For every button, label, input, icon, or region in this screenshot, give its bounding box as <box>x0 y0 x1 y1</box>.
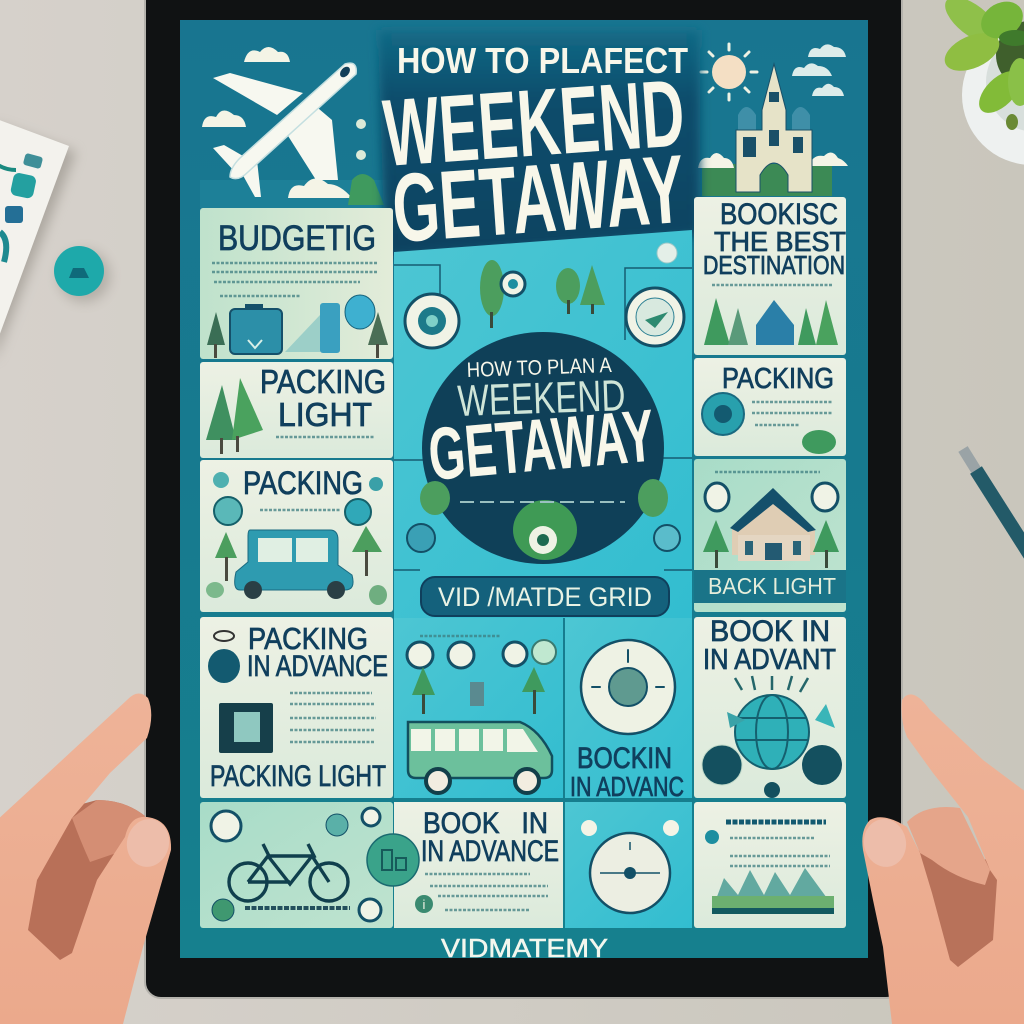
panel: packing in advance <box>200 617 393 798</box>
icon: house <box>730 488 816 561</box>
panel: budgeting: BUDGETIG <box>218 219 376 258</box>
panel: destinations chart <box>694 802 846 928</box>
banner: grid label: VID /MATDE GRID <box>438 582 652 612</box>
panel: packing right: PACKING <box>722 363 834 395</box>
icons: round markers <box>407 640 556 668</box>
icons: trees <box>206 526 387 605</box>
circle badge with heading: GETAWAY <box>425 394 658 496</box>
footer brand: VIDMATEMY <box>441 933 608 963</box>
title: WEEKEND <box>380 60 688 187</box>
thumbnail <box>860 816 910 870</box>
panel: packing light: PACKING <box>260 363 386 400</box>
right hand <box>860 694 1024 1024</box>
title <box>378 30 700 263</box>
panel: packing right <box>694 358 846 456</box>
icon: clock <box>581 820 679 913</box>
panel: booking the best destination <box>694 197 846 355</box>
panel: book in advance: IN ADVANCE <box>421 835 559 868</box>
circle badge with heading: WEEKEND <box>457 371 626 426</box>
thumbnail <box>122 815 174 871</box>
panel: back light with house <box>694 459 846 612</box>
panel: book in advant with globe: BOOK IN <box>710 615 830 648</box>
teal button on desk <box>54 246 110 302</box>
icon: dial <box>581 640 675 734</box>
icon: trees and luggage <box>207 295 388 358</box>
panel: clock <box>565 802 692 928</box>
panel: clock and booking: IN ADVANC <box>570 771 684 802</box>
header illustration: sun, clouds and castle <box>698 44 848 196</box>
notebook on desk <box>0 118 76 362</box>
panel: clock and booking <box>565 618 692 802</box>
icons: round markers <box>211 808 381 921</box>
icon: suitcase <box>230 304 282 354</box>
icon: globe <box>735 695 809 769</box>
icon: green circle <box>367 834 419 886</box>
icons: round markers <box>213 472 383 525</box>
panel: packing with car: PACKING <box>243 465 363 501</box>
panel: bus <box>394 618 563 798</box>
icon: dial left <box>405 294 459 348</box>
icon: village skyline <box>712 868 834 914</box>
banner: back light: BACK LIGHT <box>708 573 836 599</box>
icons: trees and house <box>704 298 838 345</box>
icon: teal badge <box>702 393 744 435</box>
plane fuselage, wings and tail <box>213 73 338 197</box>
panel: packing light <box>200 362 393 458</box>
icon: dial right <box>626 288 684 346</box>
header illustration: plane and clouds <box>200 47 390 208</box>
icon: info badge: i <box>423 897 426 912</box>
icon: badge <box>208 631 240 683</box>
panel: packing in advance: IN ADVANCE <box>247 650 388 683</box>
panel: clock and booking: BOCKIN <box>577 742 672 775</box>
icon: trees <box>206 378 263 454</box>
tablet body <box>145 0 902 998</box>
panel: book in advance <box>394 802 563 928</box>
panel: booking the best destination: BOOKISC <box>720 198 838 231</box>
panel: book in advance: BOOK IN <box>423 807 548 840</box>
icon: bus <box>408 722 552 793</box>
icon: bicycle <box>229 844 348 901</box>
panel: booking the best destination: DESTINATION <box>703 250 845 280</box>
panel: packing in advance: PACKING <box>248 621 368 656</box>
icons: trees and markers <box>703 483 839 568</box>
panel: packing in advance: PACKING LIGHT <box>210 760 386 793</box>
circle badge with heading <box>420 332 668 564</box>
icon: bag <box>219 703 273 753</box>
panel: booking the best destination: THE BEST <box>714 226 846 257</box>
panel: book in advant with globe: IN ADVANT <box>703 644 836 676</box>
panel: budgeting <box>200 208 393 359</box>
panel: book in advant with globe <box>694 615 846 798</box>
circle badge with heading: HOW TO PLAN A <box>466 354 612 382</box>
panel: packing with car <box>200 460 393 612</box>
icons: round markers and rays <box>702 676 842 798</box>
icons beside badge <box>407 524 680 552</box>
title: HOW TO PLAFECT <box>397 40 688 81</box>
icons: trees and traveller <box>412 667 545 714</box>
plant in white pot <box>938 0 1024 165</box>
left hand <box>0 693 174 1024</box>
icons: trees and markers <box>480 243 677 328</box>
panel: packing light: LIGHT <box>278 396 372 433</box>
icon: car <box>235 530 353 599</box>
infographic screen <box>180 20 868 963</box>
title: GETAWAY <box>389 134 688 263</box>
icon: green blob <box>802 430 836 454</box>
pen on desk <box>963 449 1024 555</box>
panel: central hero <box>394 230 692 618</box>
icon: info badge <box>415 895 433 913</box>
panel: bicycle <box>200 802 393 928</box>
